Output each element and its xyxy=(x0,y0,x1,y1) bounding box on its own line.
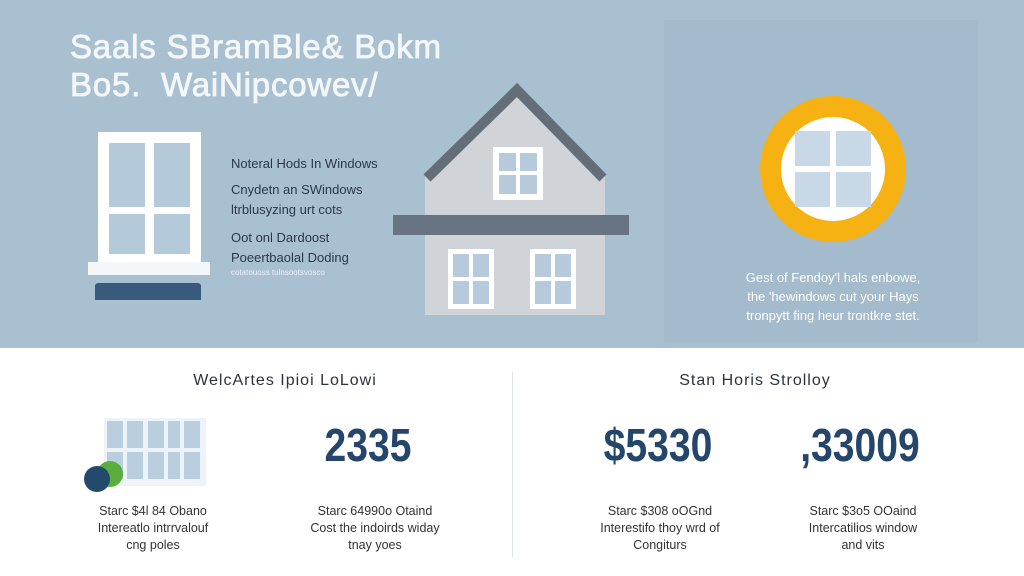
caption 4 xyxy=(809,504,918,552)
caption 3 xyxy=(600,504,720,552)
caption 4: and vits xyxy=(841,538,885,552)
icon: left window xyxy=(88,132,210,300)
caption 2: tnay yoes xyxy=(348,538,402,552)
caption 3: Interestifo thoy wrd of xyxy=(600,521,720,535)
text block: left list: ltrblusyzing urt cots Oot onl Dardoost xyxy=(231,202,342,245)
stat: 2335: 2335 xyxy=(325,419,411,471)
text block: left list: Poeertbaolal Doding xyxy=(231,250,349,265)
text: right caption xyxy=(746,270,920,323)
caption 4: Starc $3o5 OOaind xyxy=(809,504,916,518)
caption 3: Congiturs xyxy=(633,538,687,552)
stat: $5330: $5330 xyxy=(604,419,712,471)
title: Saals SBramBle& Bokm xyxy=(70,28,442,65)
text: right caption: Gest of Fendoy'l hals enbowe, xyxy=(746,270,920,285)
heading: right section: Stan Horis Strolloy xyxy=(679,372,831,389)
caption 2: Starc 64990o Otaind xyxy=(318,504,432,518)
heading: left section: WelcArtes Ipioi LoLowi xyxy=(193,372,377,389)
caption 1 xyxy=(98,504,208,552)
caption 2: Cost the indoirds widay xyxy=(310,521,440,535)
divider xyxy=(512,372,513,557)
top banner background xyxy=(0,0,1024,348)
caption 1: Starc $4l 84 Obano xyxy=(99,504,207,518)
text block: left list: Noteral Hods In Windows Cnydetn an SWindows xyxy=(231,156,378,197)
title xyxy=(70,28,442,104)
stat: ,33009: ,33009 xyxy=(800,419,920,471)
text: right caption: the 'hewindows cut your Hays xyxy=(747,289,919,304)
text block: left list xyxy=(231,156,378,277)
icon: house xyxy=(393,83,629,315)
text block: left list: cotatouoss tulnsootsvosco xyxy=(231,268,325,277)
caption 1: cng poles xyxy=(126,538,180,552)
caption 1: Intereatlo intrrvalouf xyxy=(98,521,208,535)
caption 4: Intercatilios window xyxy=(809,521,917,535)
icon: window grid with circles xyxy=(84,418,206,492)
caption 3: Starc $308 oOGnd xyxy=(608,504,712,518)
caption 2 xyxy=(310,504,440,552)
panel: right feature xyxy=(664,20,978,342)
icon: yellow circle window xyxy=(760,96,906,242)
text: right caption: tronpytt fing heur trontkre stet. xyxy=(746,308,920,323)
title: Bo5. WaiNipcowev/ xyxy=(70,66,378,103)
